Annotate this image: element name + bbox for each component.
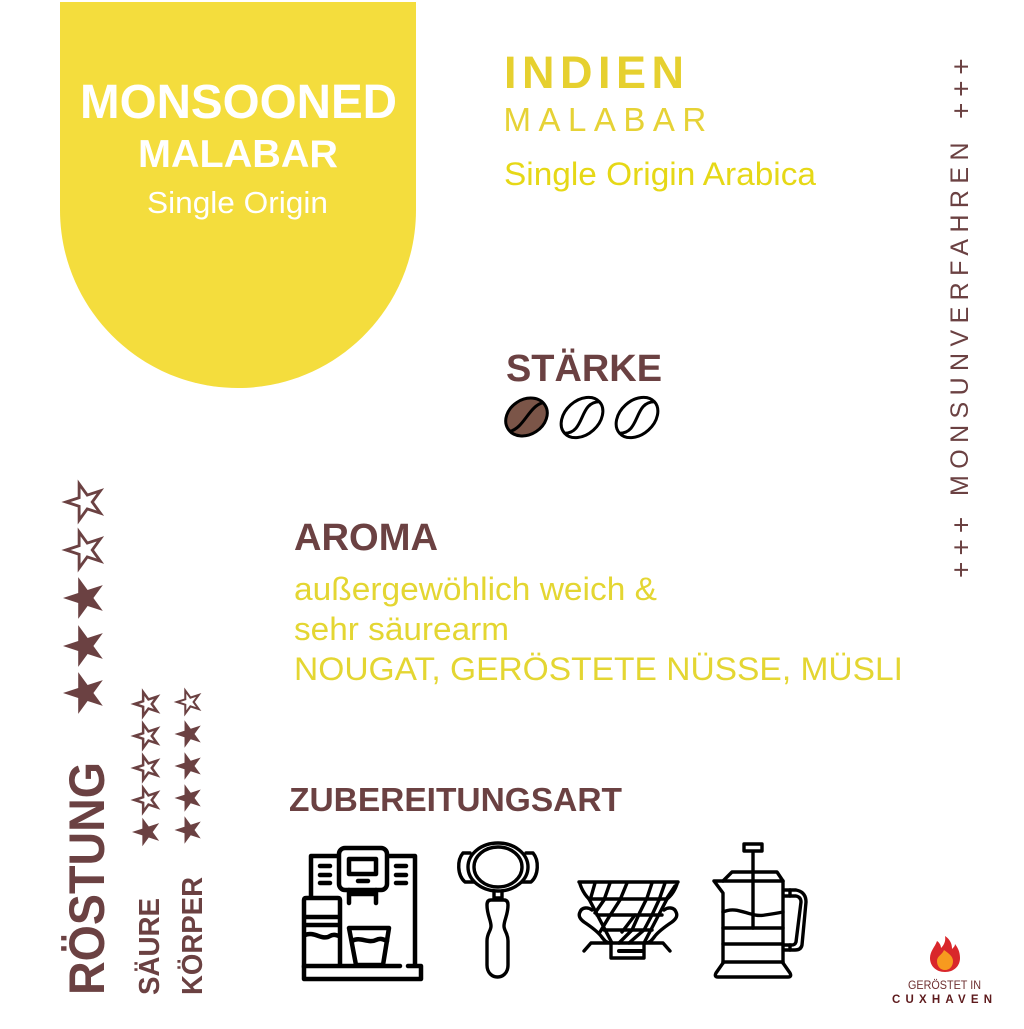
heading: Zubereitungsart: ZUBEREITUNGSART — [289, 781, 622, 818]
text: Geröstet in: GERÖSTET IN — [908, 978, 981, 992]
side text: Monsunverfahren — [946, 53, 976, 578]
country: INDIEN — [504, 47, 690, 98]
subtitle: Single Origin: Single Origin — [147, 185, 328, 220]
rating: Säure — [132, 692, 166, 995]
variety: Single Origin Arabica — [504, 156, 816, 192]
aroma line 3: NOUGAT, GERÖSTETE NÜSSE, MÜSLI — [294, 651, 903, 687]
aroma line 2: sehr säurearm — [294, 611, 509, 647]
label: Säure: SÄURE — [133, 898, 166, 995]
stars: Röstung — [63, 484, 103, 714]
label: Röstung: RÖSTUNG — [59, 762, 115, 995]
aroma line 1: außergewöhlich weich & — [294, 571, 657, 607]
heading: origin — [504, 47, 816, 192]
heading: Stärke: STÄRKE — [506, 347, 662, 390]
icon: empty coffee bean — [608, 389, 666, 446]
icon: empty coffee bean — [553, 389, 611, 446]
panel: yellow title badge — [60, 2, 416, 388]
region: MALABAR — [504, 101, 714, 138]
stars: Säure — [132, 692, 159, 846]
icon: pour-over dripper — [579, 882, 678, 958]
logo: Geröstet in Cuxhaven — [892, 936, 997, 1006]
rating: Röstung — [59, 484, 115, 995]
subtitle: Malabar: MALABAR — [138, 133, 338, 176]
side text: Monsunverfahren: +++ — [946, 53, 976, 119]
icon: flame — [930, 936, 960, 972]
text: Cuxhaven: CUXHAVEN — [892, 994, 997, 1006]
label: Körper: KÖRPER — [176, 877, 209, 995]
icon: french press — [714, 844, 806, 977]
heading: Aroma: AROMA — [294, 517, 438, 559]
side text: Monsunverfahren: MONSUNVERFAHREN — [946, 136, 974, 496]
icon: portafilter — [459, 843, 537, 977]
title: Monsooned: MONSOONED — [80, 76, 397, 129]
side text: Monsunverfahren: +++ — [946, 511, 976, 578]
rating: Körper — [174, 691, 209, 995]
icon: filled coffee bean — [499, 390, 554, 444]
icon: coffee machine — [304, 848, 421, 979]
panel: aroma — [294, 517, 903, 687]
stars: Körper — [174, 691, 201, 844]
panel: strength — [499, 347, 666, 446]
